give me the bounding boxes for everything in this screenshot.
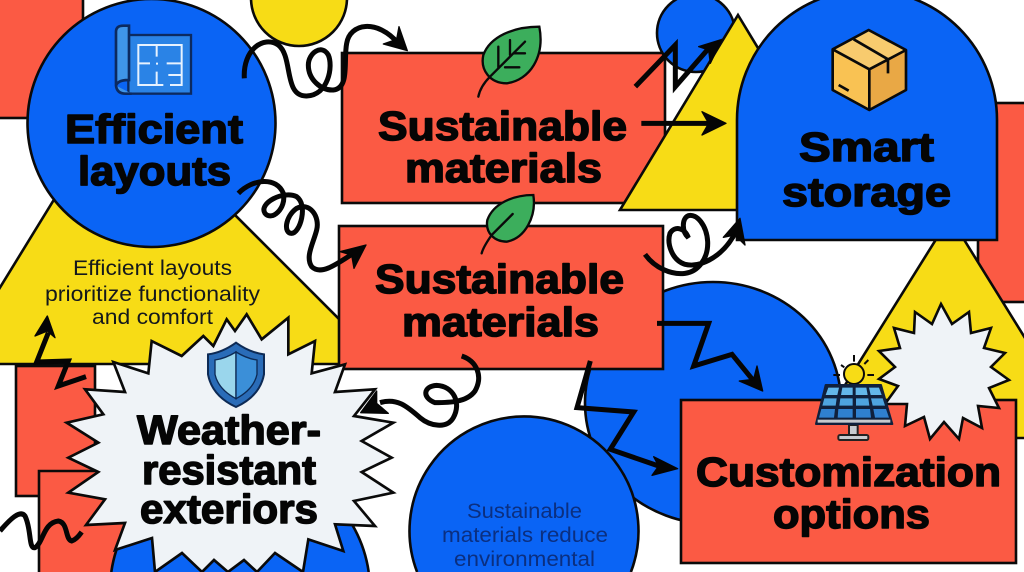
arrow: zigzag to customization left: [577, 361, 678, 475]
panel: sustainable materials top: materials: [405, 145, 602, 191]
icon: leaf middle: [482, 195, 534, 253]
panel: customization options: [681, 400, 1016, 563]
shape: yellow triangle behind efficient layouts: [0, 97, 384, 364]
panel: smart storage: [737, 0, 997, 240]
shape: red block right: [978, 103, 1024, 302]
panel: sustainable materials middle: [339, 226, 663, 369]
shape: yellow circle top: [251, 0, 347, 46]
shape: red block bottom left: [39, 471, 129, 572]
panel: sustainable materials top: [342, 53, 665, 203]
text: efficient layouts description: [45, 257, 261, 329]
panel: sustainable materials middle: Sustainable: [375, 256, 624, 302]
text: efficient layouts description: and comfort: [92, 306, 213, 329]
panel: sustainable materials description circle: environmental: [454, 548, 595, 571]
shape: red block lower left: [16, 366, 95, 496]
panel: efficient layouts: layouts: [78, 148, 231, 194]
arrow: zigzag to small blue circle: [635, 39, 722, 87]
icon: leaf top: [478, 27, 541, 97]
panel: weather-resistant exteriors starburst: resistant: [142, 447, 316, 493]
panel: efficient layouts: [28, 0, 276, 247]
panel: efficient layouts: Efficient: [65, 106, 243, 152]
icon: solar panel with sun: [816, 355, 892, 440]
shape: blue circle behind starburst: [111, 460, 369, 572]
shape: large blue ellipse: [585, 282, 841, 524]
shape: red square top left: [0, 0, 83, 118]
icon: shield: [208, 343, 264, 407]
panel: customization options: options: [773, 491, 930, 537]
text: efficient layouts description: prioritize functionality: [45, 283, 261, 306]
arrow: zigzag to customization top: [657, 323, 763, 391]
arrow: squiggle bottom left: [0, 514, 82, 548]
panel: sustainable materials middle: materials: [402, 299, 599, 345]
panel: weather-resistant exteriors starburst: exteriors: [140, 486, 318, 532]
icon: blueprint: [116, 26, 191, 94]
panel: smart storage: Smart: [799, 124, 934, 170]
panel: customization options: Customization: [696, 449, 1001, 495]
arrow: efficient layouts to middle sustainable materials: [238, 181, 366, 270]
panel: weather-resistant exteriors starburst: Weather-: [137, 407, 321, 453]
shape: yellow triangle top right: [620, 15, 856, 210]
panel: sustainable materials description circle: materials reduce: [442, 524, 608, 547]
arrow: sustainable materials to weather-resistant exteriors: [361, 356, 479, 425]
arrow: zigzag into yellow triangle: [35, 316, 86, 386]
panel: smart storage: storage: [782, 169, 951, 215]
shape: yellow triangle bottom right: [812, 217, 1024, 438]
shape: white starburst right: [879, 304, 1009, 439]
panel: weather-resistant exteriors starburst: [67, 314, 393, 572]
arrow: curly to smart storage: [645, 215, 745, 274]
panel: sustainable materials description circle: [410, 416, 638, 572]
icon: cardboard box: [833, 30, 906, 110]
arrow: straight to smart storage: [641, 112, 726, 135]
arrow: efficient layouts to top sustainable materials: [244, 26, 407, 96]
panel: sustainable materials description circle: Sustainable: [467, 500, 582, 523]
shape: small blue circle top right: [657, 0, 735, 72]
text: efficient layouts description: Efficient layouts: [73, 257, 232, 280]
panel: sustainable materials top: Sustainable: [378, 103, 627, 149]
